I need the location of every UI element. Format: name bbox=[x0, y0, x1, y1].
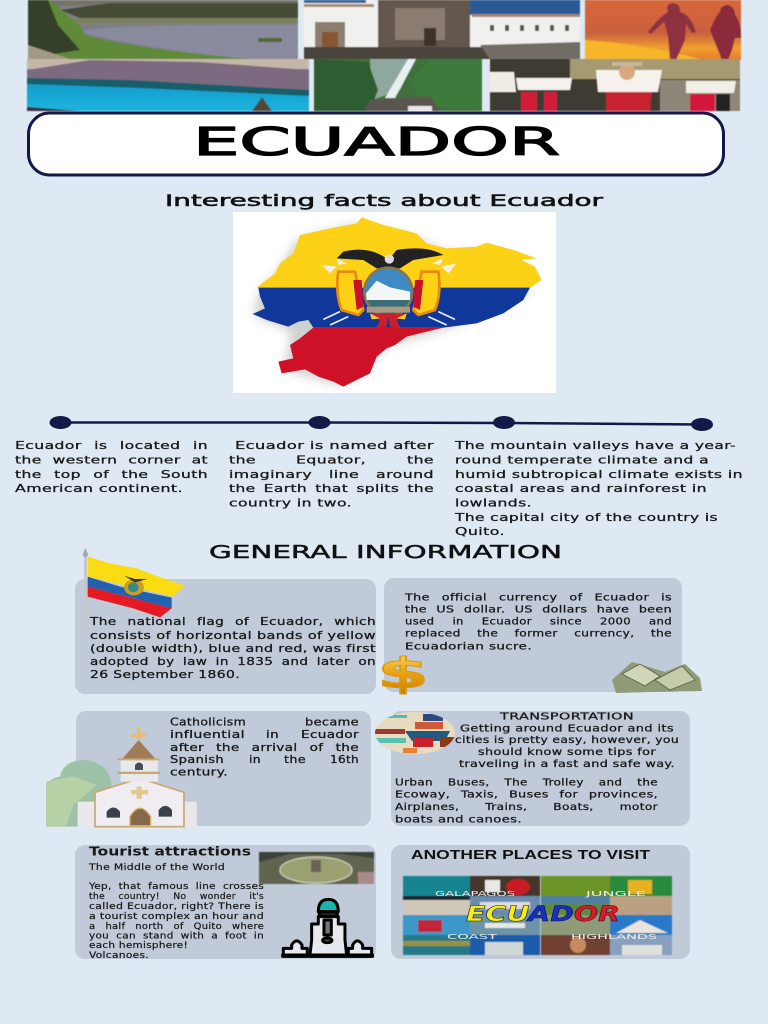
text: climate and capital: humid subtropical climate exists in bbox=[455, 468, 743, 481]
text: location: the top of the South bbox=[15, 468, 208, 481]
religion text: 16th bbox=[330, 753, 359, 766]
text: climate and capital: round temperate climate and a bbox=[455, 454, 709, 466]
icon: church with foliage bbox=[46, 728, 197, 827]
text: name origin: the bbox=[229, 454, 256, 466]
tourist text: a half north of Quito where bbox=[89, 922, 264, 932]
collage title: ECU AD OR bbox=[466, 902, 620, 926]
transportation options: Airplanes, Trains, Boats, motor bbox=[395, 802, 659, 813]
text: name origin: Equator, bbox=[296, 454, 366, 466]
transportation heading and intro: TRANSPORTATION bbox=[499, 712, 634, 722]
photo collage of regions: JUNGLE bbox=[584, 890, 646, 898]
panel: religion bbox=[46, 711, 371, 827]
photo: Middle of the World aerial bbox=[259, 852, 374, 884]
timeline bbox=[50, 416, 713, 431]
photo: lake bbox=[28, 0, 298, 59]
text: climate and capital bbox=[454, 439, 743, 538]
icon: waving flag bbox=[83, 548, 185, 637]
flag text: The national flag of Ecuador, which bbox=[89, 615, 376, 628]
text: location: American continent. bbox=[15, 482, 183, 495]
religion text: became bbox=[305, 716, 359, 728]
timeline marker 4 bbox=[691, 418, 713, 431]
transportation options bbox=[395, 778, 659, 826]
photo collage of regions: HIGHLANDS bbox=[571, 933, 658, 941]
subtitle: Interesting facts about Ecuador bbox=[165, 191, 604, 210]
text: climate and capital: The mountain valleys have a year- bbox=[454, 439, 736, 452]
tourist text: each hemisphere! bbox=[89, 941, 188, 951]
photo: waterfall bbox=[314, 59, 482, 111]
transportation options: Ecoway, Taxis, Buses for provinces, bbox=[395, 790, 658, 800]
coat of arms bbox=[322, 248, 457, 327]
transportation heading and intro: Getting around Ecuador and its bbox=[460, 724, 674, 734]
flag text bbox=[89, 615, 376, 681]
currency text: replaced the former currency, the bbox=[405, 628, 672, 640]
tourist text: Yep, that famous line crosses bbox=[88, 882, 264, 892]
text: name origin: the bbox=[407, 454, 434, 466]
religion text: Ecuador bbox=[301, 728, 359, 741]
transportation options: boats and canoes. bbox=[395, 814, 522, 826]
icon: transport circle bbox=[375, 712, 455, 754]
panel: currency bbox=[377, 578, 702, 698]
map: yellow band bbox=[257, 217, 542, 288]
photo collage of regions: COAST bbox=[447, 933, 498, 941]
tourist text: a tourist complex an hour and bbox=[89, 912, 264, 922]
flag text: adopted by law in 1835 and later on bbox=[90, 655, 376, 668]
text: climate and capital: coastal areas and rainforest in bbox=[455, 482, 707, 495]
panel: flag bbox=[75, 548, 376, 694]
religion text bbox=[170, 716, 359, 778]
transportation heading and intro: should know some tips for bbox=[478, 747, 657, 758]
text: climate and capital: lowlands. bbox=[455, 496, 532, 510]
tourist heading: Tourist attractions bbox=[89, 844, 251, 858]
text: climate and capital: The capital city of the country is bbox=[454, 511, 718, 524]
transportation heading and intro: traveling in a fast and safe way. bbox=[459, 759, 675, 770]
religion text: in bbox=[249, 753, 261, 766]
map: red band bbox=[278, 328, 443, 387]
panel: tourist attractions bbox=[75, 844, 376, 961]
religion text: Spanish bbox=[170, 753, 224, 766]
flag text: 26 September 1860. bbox=[90, 668, 240, 681]
timeline marker 3 bbox=[493, 416, 515, 429]
text: name origin: the Earth that splits the bbox=[229, 482, 434, 495]
places heading: ANOTHER PLACES TO VISIT bbox=[411, 847, 650, 862]
currency text: The official currency of Ecuador is bbox=[404, 592, 672, 604]
photo: folk dancers bbox=[490, 59, 740, 111]
religion text: after the arrival of the bbox=[170, 741, 359, 754]
religion text: century. bbox=[170, 766, 228, 778]
icon: equator monument bbox=[283, 899, 373, 956]
map shadow bbox=[253, 223, 530, 385]
currency text: Ecuadorian sucre. bbox=[405, 642, 532, 652]
text: name origin: Ecuador is named after bbox=[235, 439, 434, 452]
title: ECUADOR bbox=[193, 120, 560, 164]
transportation heading and intro bbox=[455, 712, 679, 770]
title banner bbox=[28, 113, 724, 175]
transportation options: Urban Buses, The Trolley and the bbox=[395, 778, 658, 788]
tourist subheading: The Middle of the World bbox=[88, 863, 225, 873]
map: blue band bbox=[253, 288, 530, 328]
religion text: the bbox=[284, 753, 306, 766]
text: climate and capital: Quito. bbox=[455, 525, 505, 538]
panel: other places bbox=[391, 845, 690, 959]
photo: colonial church bbox=[304, 0, 580, 59]
currency text: used in Ecuador since 2000 and bbox=[405, 616, 672, 628]
collage labels: GALAPAGOS bbox=[435, 890, 516, 898]
tourist text: called Ecuador, right? There is bbox=[89, 902, 264, 912]
flag text: (double width), blue and red, was first bbox=[90, 642, 376, 655]
text: name origin: country in two. bbox=[229, 496, 352, 510]
text: location: Ecuador is located in bbox=[15, 439, 208, 452]
timeline marker 2 bbox=[308, 416, 330, 429]
text: location bbox=[15, 439, 209, 495]
text: name origin bbox=[229, 439, 434, 510]
map of Ecuador with flag bbox=[233, 212, 556, 393]
panel: transportation bbox=[375, 711, 690, 826]
tourist text: Volcanoes. bbox=[89, 951, 149, 961]
header photo collage bbox=[27, 0, 741, 111]
religion text: Catholicism bbox=[170, 716, 246, 728]
icon: gold dollar sign: $ bbox=[377, 649, 429, 698]
section heading: GENERAL INFORMATION bbox=[209, 543, 562, 563]
currency text bbox=[404, 592, 672, 652]
photo collage of regions bbox=[403, 876, 672, 955]
religion text: in bbox=[266, 728, 279, 741]
flag text: consists of horizontal bands of yellow bbox=[90, 629, 376, 642]
currency text: the US dollar. US dollars have been bbox=[405, 604, 672, 616]
text: name origin: imaginary line around bbox=[229, 468, 434, 481]
tourist text: you can stand with a foot in bbox=[89, 932, 264, 942]
transportation heading and intro: cities is pretty easy, however, you bbox=[455, 735, 679, 746]
tourist text bbox=[88, 882, 264, 961]
tourist text: the country! No wonder it's bbox=[89, 892, 264, 902]
religion text: influential bbox=[170, 728, 245, 741]
photo: sunset silhouettes bbox=[585, 0, 741, 60]
timeline marker 1 bbox=[50, 416, 72, 429]
text: location: the western corner at bbox=[15, 454, 209, 466]
photo: blue lagoon bbox=[27, 59, 309, 111]
icon: banknotes bbox=[612, 662, 702, 693]
